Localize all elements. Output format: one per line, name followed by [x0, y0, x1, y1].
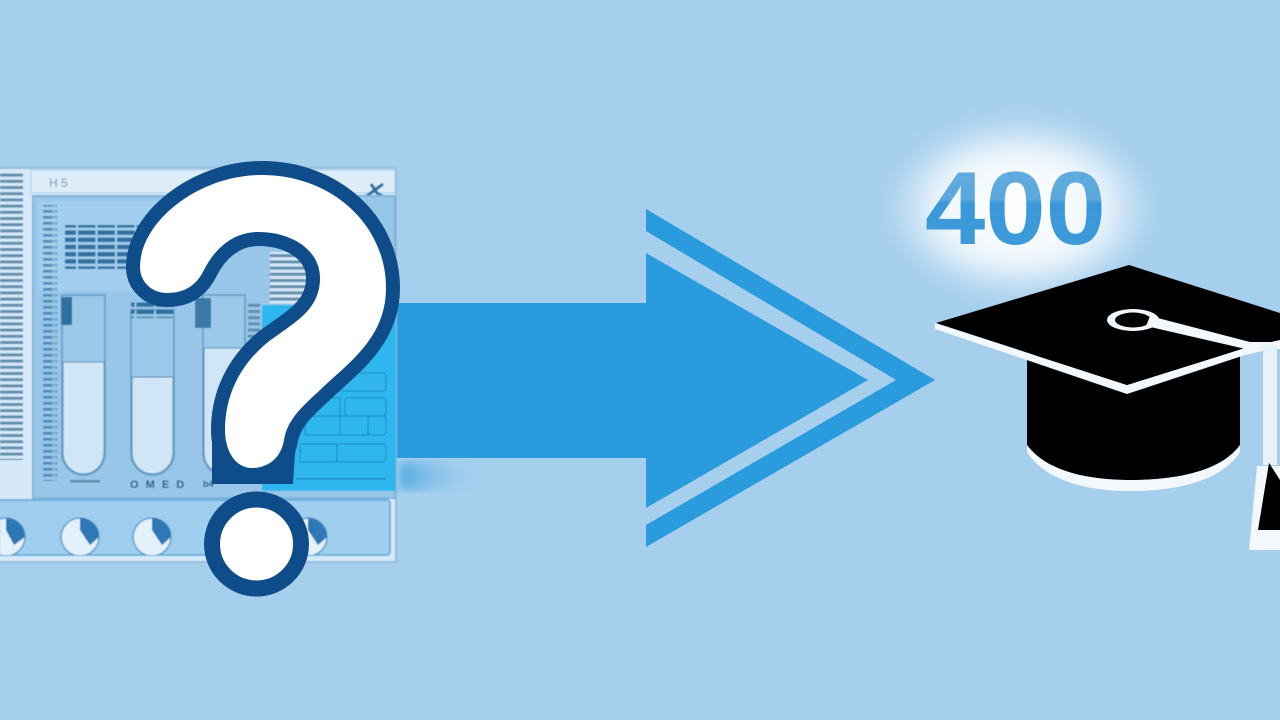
- callout: 400 glow: [888, 118, 1152, 298]
- arrow head: [646, 253, 868, 508]
- top bar label: H 5: [49, 176, 68, 190]
- tassel: [1249, 463, 1280, 550]
- tassel cord: [1146, 316, 1280, 350]
- question mark dot: [212, 500, 301, 588]
- data table: [65, 225, 141, 269]
- gauge strip: [0, 500, 390, 556]
- upper chart tint: [38, 201, 158, 291]
- gauge 3: [133, 518, 171, 556]
- gauge 2: [61, 518, 99, 556]
- test tube 1: [61, 295, 105, 475]
- bright keyboard panel: [262, 305, 396, 491]
- axis labels: [43, 205, 57, 481]
- panel: dashboard: [0, 168, 396, 562]
- left list strip: [0, 172, 23, 460]
- arrow outer chevron: [646, 209, 935, 547]
- button: [1107, 309, 1159, 331]
- board: [936, 265, 1280, 385]
- arrow shaft: [396, 303, 648, 458]
- cap rim: [1027, 445, 1240, 491]
- gauge 1: [0, 518, 25, 556]
- gauge 4: [302, 516, 328, 556]
- tube 1 caption: [70, 480, 100, 482]
- test tube 2: [131, 300, 175, 475]
- board underside: [935, 323, 1280, 394]
- question mark body: [140, 175, 386, 468]
- side list: [270, 252, 306, 304]
- panel frame: [0, 168, 396, 562]
- test tube 3: [195, 295, 245, 475]
- main chart area: [33, 196, 395, 498]
- icon: question mark: [140, 175, 386, 588]
- tube 3 caption: b4: [203, 479, 214, 489]
- icon: graduation cap: [935, 265, 1280, 550]
- number 400: 400: [925, 151, 1106, 267]
- cap body: [1027, 355, 1240, 480]
- arrow: [396, 209, 935, 547]
- side bars near tube 3: [248, 302, 260, 362]
- arrow smudge: [400, 462, 484, 490]
- icon: plane: [364, 184, 384, 198]
- top bar: [31, 170, 395, 193]
- question mark stem base: [212, 440, 296, 484]
- tube 2 caption: O M E D: [130, 479, 186, 491]
